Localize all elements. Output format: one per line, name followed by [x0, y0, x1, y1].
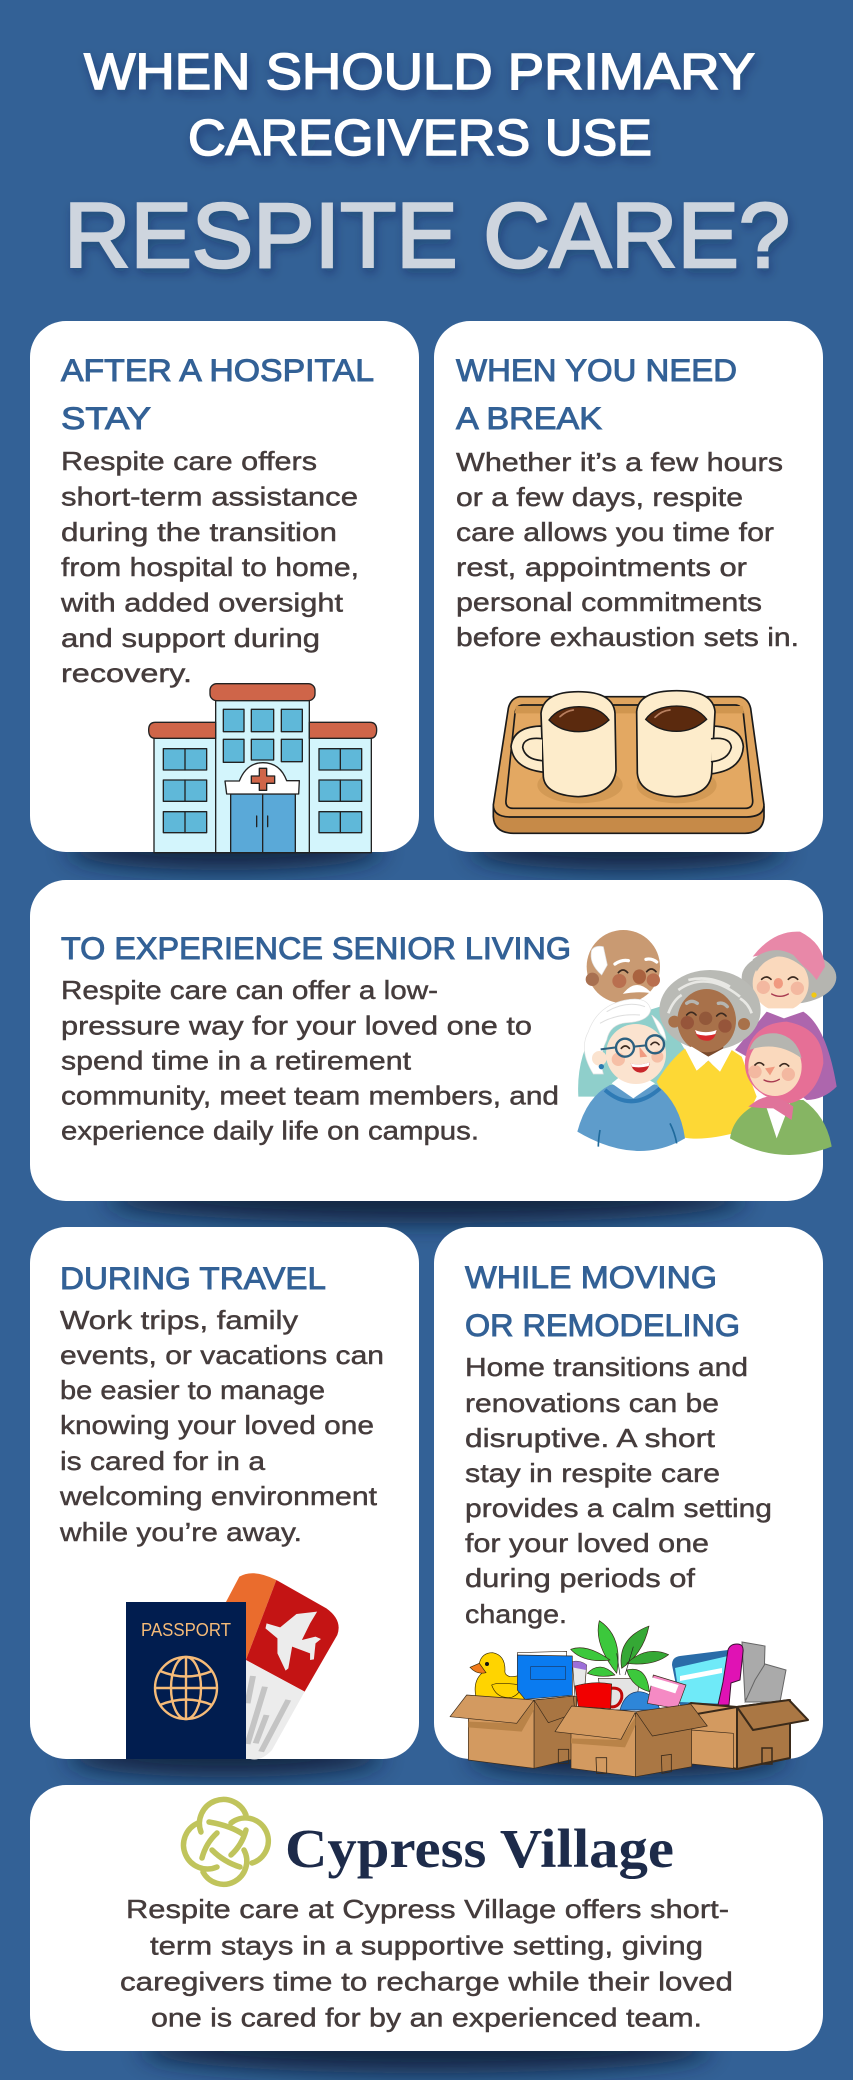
text: during travel: is cared for in a	[60, 1446, 266, 1476]
text: to experience senior living: pressure way for your loved one to	[61, 1010, 532, 1040]
text: to experience senior living	[61, 975, 559, 1146]
text: during travel: events, or vacations can	[60, 1340, 384, 1370]
text: during travel: knowing your loved one	[60, 1410, 374, 1440]
text: when you need a break: personal commitments	[456, 587, 762, 617]
text: when you need a break: or a few days, respite	[456, 482, 743, 512]
text: when you need a break: care allows you time for	[456, 517, 774, 547]
text: after a hospital stay	[60, 446, 359, 688]
heading: when you need a break: WHEN YOU NEED	[456, 352, 737, 388]
text: while moving or remodeling: disruptive. A short	[465, 1423, 716, 1453]
heading: after a hospital stay	[61, 352, 374, 436]
text: after a hospital stay: with added oversight	[60, 588, 344, 618]
panel: while moving or remodeling	[434, 1227, 823, 1777]
logo: cypress village knot	[184, 1799, 268, 1884]
text: while moving or remodeling: change.	[465, 1599, 567, 1629]
text: when you need a break	[456, 447, 799, 652]
text: after a hospital stay: short-term assistance	[61, 482, 358, 512]
text: during travel: welcoming environment	[59, 1481, 378, 1511]
icon: passport: PASSPORT	[141, 1620, 231, 1640]
text: after a hospital stay: Respite care offers	[61, 446, 317, 476]
text: during travel: while you’re away.	[59, 1517, 302, 1547]
text: while moving or remodeling: for your loved one	[465, 1528, 709, 1558]
text: cypress village closing statement: Respite care at Cypress Village offers short-	[126, 1894, 729, 1924]
text: during travel	[59, 1305, 384, 1547]
icon: hospital building	[149, 684, 377, 853]
heading: when you need a break: A BREAK	[456, 400, 602, 436]
title: CAREGIVERS USE	[188, 109, 652, 166]
text: when you need a break: before exhaustion sets in.	[456, 622, 799, 652]
text: after a hospital stay: from hospital to home,	[61, 552, 359, 582]
title: WHEN SHOULD PRIMARY	[84, 43, 755, 100]
icon: coffee mugs on tray	[493, 691, 764, 833]
title	[64, 43, 790, 287]
text: during travel: Work trips, family	[60, 1305, 298, 1335]
text: to experience senior living: community, meet team members, and	[61, 1080, 559, 1110]
title: RESPITE CARE?	[64, 185, 790, 287]
panel: after a hospital stay	[30, 321, 419, 853]
text: to experience senior living: Respite care can offer a low-	[61, 975, 438, 1005]
text: after a hospital stay: and support during	[61, 623, 320, 653]
heading: after a hospital stay: STAY	[61, 400, 151, 436]
text: to experience senior living: experience daily life on campus.	[61, 1116, 479, 1146]
heading: when you need a break	[456, 352, 737, 436]
text: while moving or remodeling: stay in respite care	[465, 1458, 720, 1488]
heading: to experience senior living: TO EXPERIENCE SENIOR LIVING	[61, 930, 571, 966]
icon: plane ticket	[226, 1573, 339, 1759]
panel: to experience senior living	[30, 880, 837, 1201]
text: while moving or remodeling: Home transitions and	[465, 1352, 748, 1382]
text: while moving or remodeling: during periods of	[465, 1563, 696, 1593]
text: to experience senior living: spend time in a retirement	[61, 1046, 412, 1076]
text: cypress village closing statement: term stays in a supportive setting, giving	[150, 1930, 703, 1960]
heading: while moving or remodeling: OR REMODELING	[465, 1307, 740, 1343]
text: after a hospital stay: during the transition	[61, 517, 337, 547]
text: when you need a break: Whether it’s a few hours	[456, 447, 783, 477]
heading: while moving or remodeling	[465, 1259, 740, 1343]
text: cypress village closing statement: one is cared for by an experienced team.	[151, 2002, 702, 2032]
icon: group of smiling seniors	[577, 930, 837, 1155]
text: after a hospital stay: recovery.	[61, 658, 192, 688]
text: cypress village closing statement	[120, 1894, 733, 2032]
panel: cypress village	[30, 1785, 823, 2051]
text: while moving or remodeling: provides a calm setting	[465, 1493, 772, 1523]
text: while moving or remodeling: renovations can be	[465, 1388, 719, 1418]
icon: moving boxes with belongings	[450, 1621, 808, 1777]
text: during travel: be easier to manage	[60, 1375, 325, 1405]
panel: during travel	[30, 1227, 419, 1759]
heading: during travel: DURING TRAVEL	[60, 1260, 326, 1296]
text: cypress village closing statement: caregivers time to recharge while their loved	[120, 1966, 733, 1996]
text: when you need a break: rest, appointments or	[456, 552, 747, 582]
icon: passport	[126, 1602, 246, 1759]
text: while moving or remodeling	[465, 1352, 772, 1629]
panel: when you need a break	[434, 321, 823, 852]
heading: after a hospital stay: AFTER A HOSPITAL	[61, 352, 374, 388]
logo: cypress village wordmark: Cypress Village	[285, 1818, 674, 1879]
heading: while moving or remodeling: WHILE MOVING	[465, 1259, 717, 1295]
